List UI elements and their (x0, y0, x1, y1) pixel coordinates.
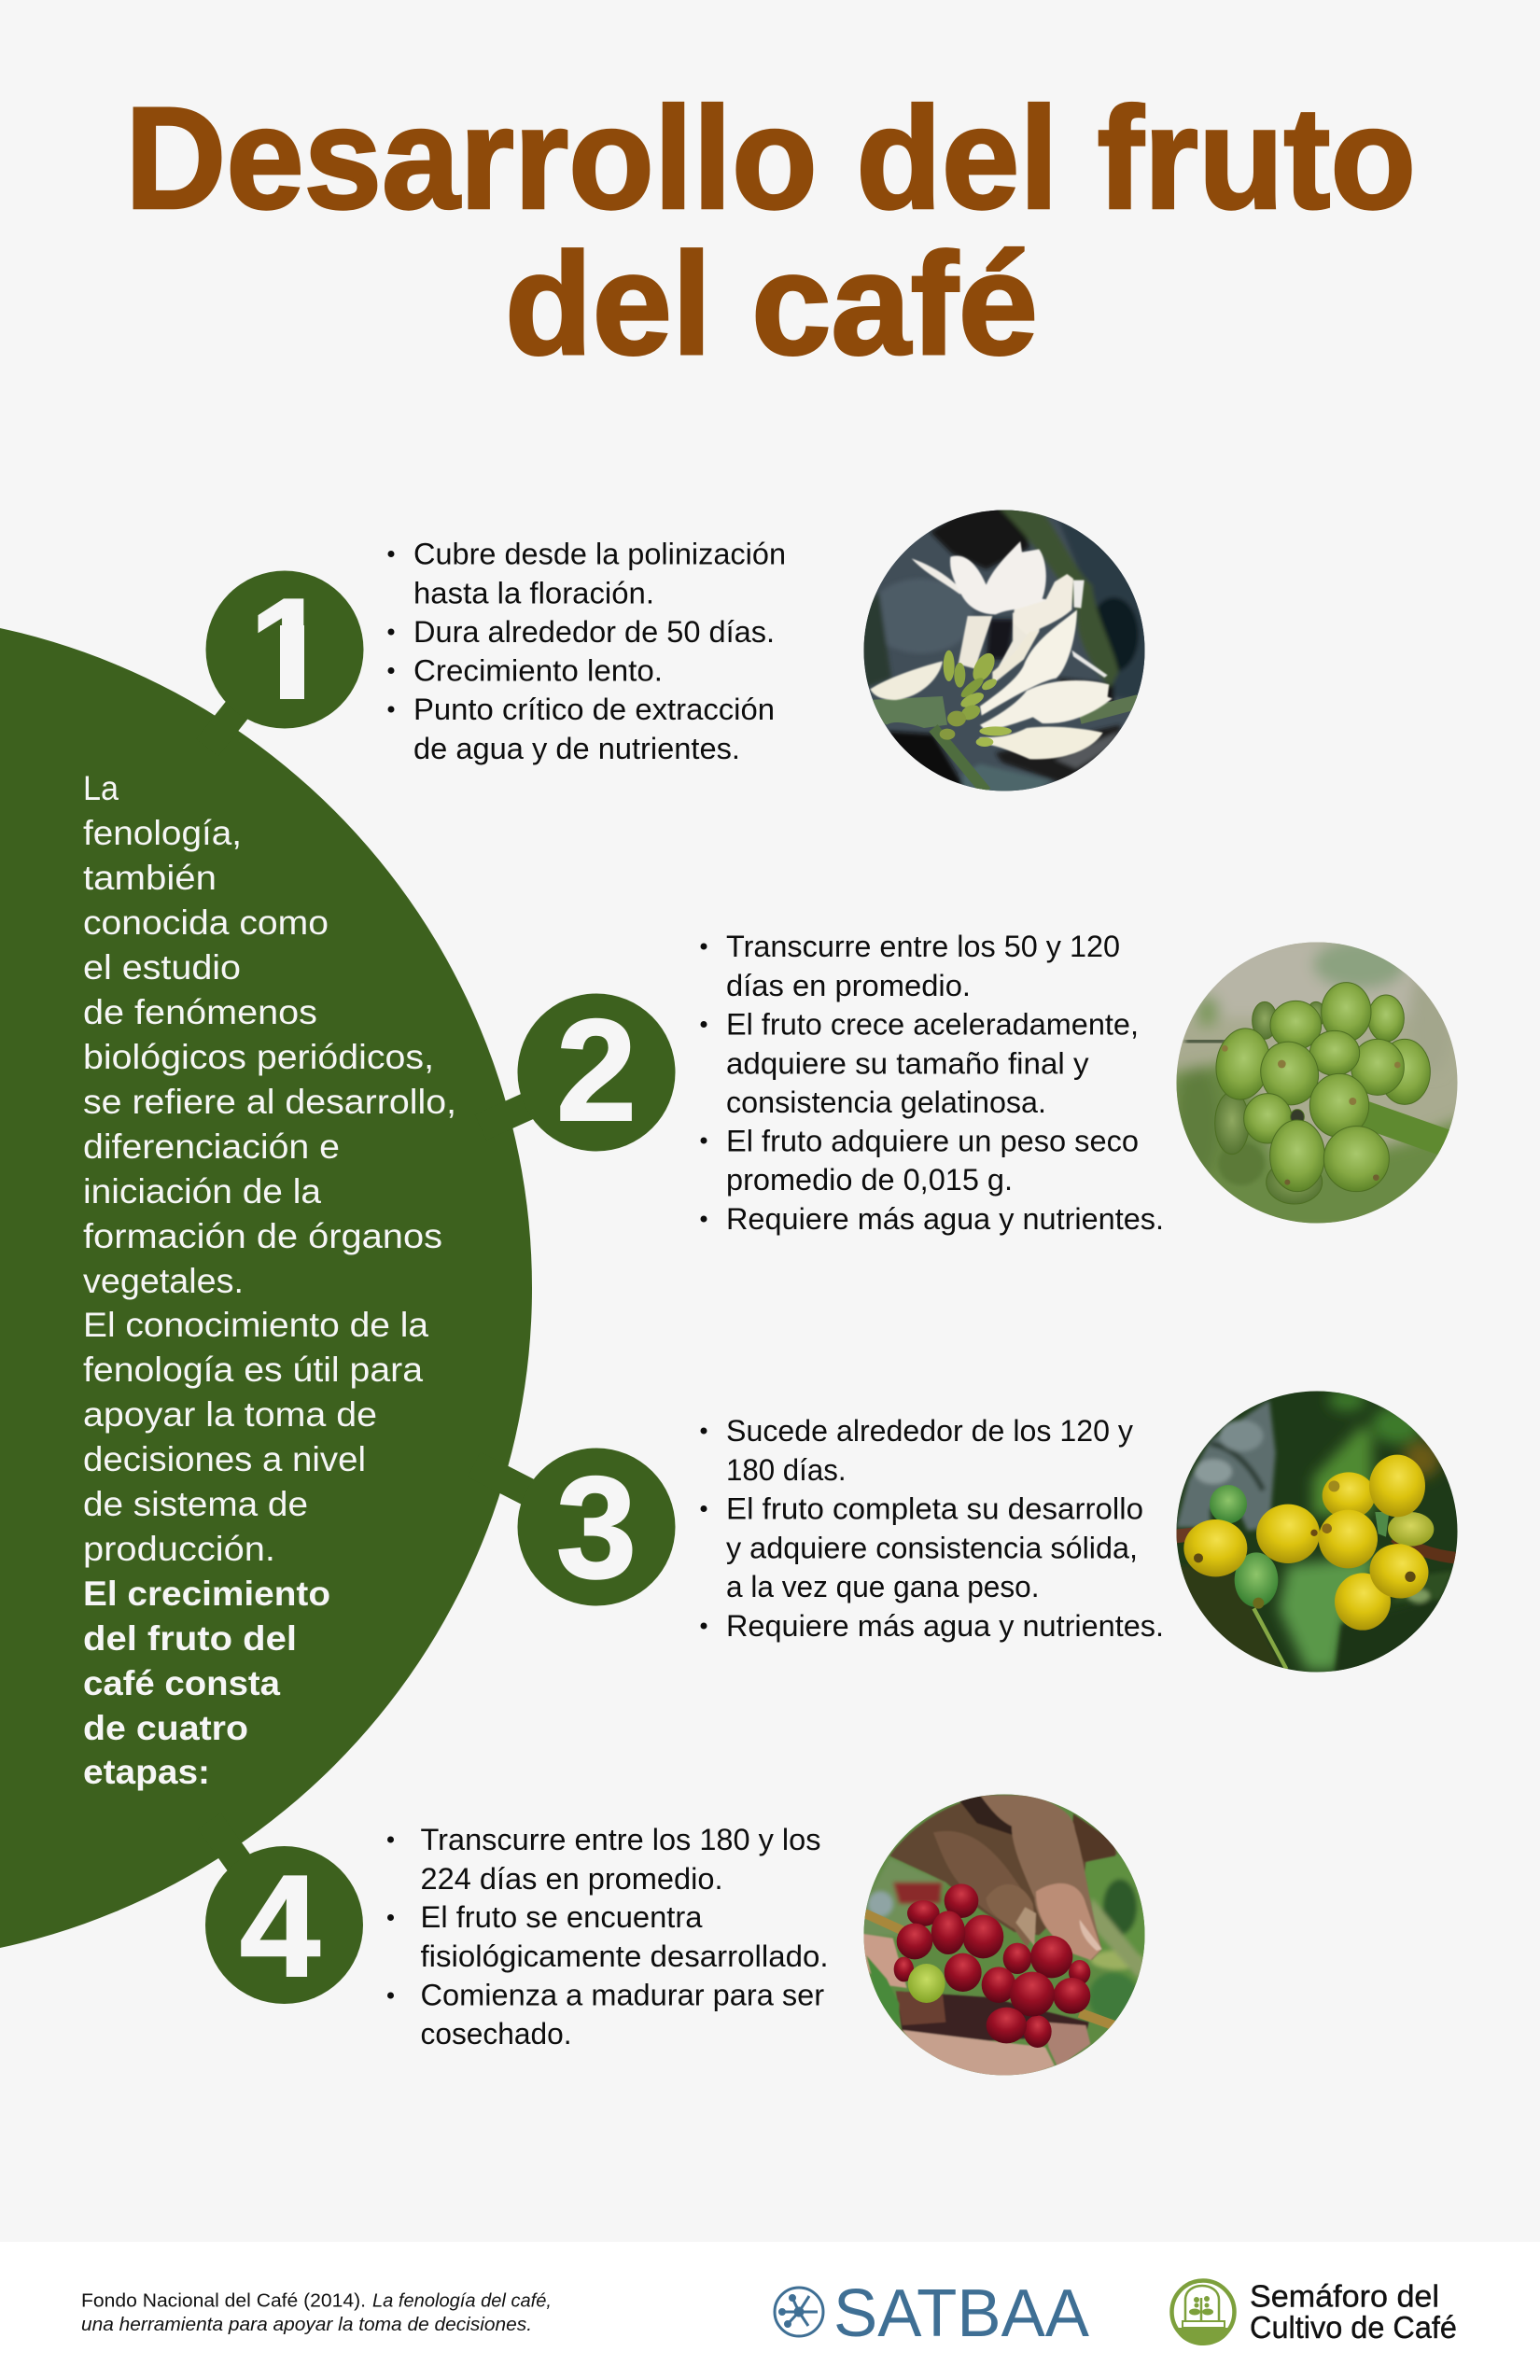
photo 4: hands with ripe red berries (864, 1794, 1144, 2076)
panel: big green semicircle (0, 612, 532, 1964)
step 2 number badge: 2 (556, 989, 637, 1151)
step 4 bullet list: Comienza a madurar para ser (420, 1979, 824, 2012)
step 1 bullet list: de agua y de nutrientes. (413, 732, 740, 765)
footer citation: una herramienta para apoyar la toma de decisiones. (81, 2315, 532, 2335)
intro text on green panel: producción. (83, 1530, 275, 1568)
photo 3: yellow coffee berries (1169, 1384, 1465, 1680)
footer citation: La fenología del café, (372, 2291, 552, 2312)
flower petals (870, 541, 1113, 759)
step 1 bullet list: Dura alrededor de 50 días. (413, 615, 775, 649)
step 2 bullet list: El fruto adquiere un peso seco (726, 1124, 1139, 1157)
intro text on green panel: fenología es útil para (83, 1351, 423, 1389)
berries (945, 1883, 978, 1918)
step 3 number badge: 3 (556, 1447, 637, 1608)
intro text on green panel: vegetales. (83, 1262, 244, 1300)
step 2 bullet list: días en promedio. (726, 969, 971, 1002)
connector: circle 2 (481, 1075, 596, 1127)
intro text on green panel: se refiere al desarrollo, (83, 1083, 456, 1121)
intro text on green panel: de sistema de (83, 1485, 308, 1523)
connector: circle 3 (474, 1464, 596, 1527)
title: Desarrollo del fruto (125, 77, 1416, 239)
intro text on green panel: de cuatro (83, 1709, 248, 1747)
step 1 number badge: 1 (249, 568, 329, 730)
berries (1210, 1485, 1247, 1523)
berry stems (1185, 1041, 1225, 1043)
footer citation (81, 2291, 552, 2335)
flower buds (944, 651, 955, 681)
step 2 bullet list (700, 930, 1164, 1236)
step 1 bullet list: Crecimiento lento. (413, 654, 663, 688)
photo 2: green coffee berries (1176, 943, 1458, 1223)
step 2 bullet list: Transcurre entre los 50 y 120 (726, 930, 1120, 963)
photo 1: coffee flowers (859, 504, 1151, 796)
step 3 bullet list: 180 días. (726, 1453, 846, 1487)
intro text on green panel: el estudio (83, 948, 241, 987)
intro text on green panel (83, 769, 456, 1791)
step 1 bullet list: hasta la floración. (413, 576, 654, 609)
intro text on green panel: diferenciación e (83, 1127, 340, 1166)
title (125, 77, 1416, 385)
intro text on green panel: formación de órganos (83, 1217, 442, 1255)
intro text on green panel: del fruto del (83, 1619, 297, 1658)
step 2 bullet list: El fruto crece aceleradamente, (726, 1008, 1139, 1042)
step 1 bullet list: Punto crítico de extracción (413, 693, 775, 726)
step 3 bullet list (700, 1414, 1164, 1643)
step 3 bullet list: a la vez que gana peso. (726, 1570, 1040, 1603)
logo: SATBAA: SATBAA (833, 2276, 1089, 2351)
intro text on green panel: también (83, 859, 217, 897)
intro text on green panel: fenología, (83, 814, 242, 852)
logo: Semáforo del Cultivo de Café: Cultivo de Café (1250, 2310, 1457, 2345)
step 4 bullet list: fisiológicamente desarrollado. (420, 1939, 829, 1973)
branch (1176, 1533, 1197, 1536)
step 3 number badge (517, 1447, 676, 1608)
logo: Semáforo del Cultivo de Café: Semáforo del (1250, 2279, 1439, 2314)
intro text on green panel: de fenómenos (83, 993, 317, 1031)
step 3 bullet list: El fruto completa su desarrollo (726, 1492, 1143, 1526)
step 3 bullet list: Sucede alrededor de los 120 y (726, 1414, 1133, 1448)
step 1 bullet list: Cubre desde la polinización (413, 538, 786, 571)
flower stems (868, 696, 947, 728)
back fingers (861, 1795, 1117, 2081)
step 4 bullet list: Transcurre entre los 180 y los (420, 1823, 821, 1856)
step 3 bullet list: y adquiere consistencia sólida, (726, 1531, 1138, 1564)
intro text on green panel: La (83, 769, 119, 807)
intro text on green panel: El crecimiento (83, 1575, 330, 1613)
intro text on green panel: conocida como (83, 903, 329, 942)
step 4 bullet list: El fruto se encuentra (420, 1900, 703, 1934)
step 2 bullet list: promedio de 0,015 g. (726, 1163, 1013, 1197)
lower hand (861, 1934, 907, 1988)
step 4 bullet list (387, 1823, 829, 2051)
connector: circle 1 (207, 650, 285, 748)
footer citation: Fondo Nacional del Café (2014). (81, 2291, 366, 2312)
step 2 number badge (517, 989, 676, 1152)
step 4 bullet list: cosechado. (420, 2017, 571, 2051)
intro text on green panel: etapas: (83, 1753, 210, 1791)
step 2 bullet list: consistencia gelatinosa. (726, 1085, 1046, 1119)
intro text on green panel: apoyar la toma de (83, 1395, 377, 1434)
step 3 bullet list: Requiere más agua y nutrientes. (726, 1609, 1164, 1643)
connector: circle 4 (209, 1821, 284, 1925)
title: del café (505, 223, 1038, 385)
step 4 number badge (205, 1845, 363, 2007)
step 4 number badge: 4 (240, 1845, 320, 2007)
footer band (0, 2242, 1540, 2380)
logo: Semáforo del Cultivo de Café (1172, 2279, 1457, 2345)
intro text on green panel: biológicos periódicos, (83, 1038, 434, 1076)
berries (1218, 1141, 1265, 1185)
intro text on green panel: café consta (83, 1664, 280, 1702)
icon: SATBAA network (775, 2288, 823, 2336)
icon: plant under dome (1172, 2281, 1234, 2345)
step 2 bullet list: Requiere más agua y nutrientes. (726, 1202, 1164, 1236)
step 1 number badge (205, 568, 364, 730)
intro text on green panel: iniciación de la (83, 1172, 321, 1211)
intro text on green panel: decisiones a nivel (83, 1440, 366, 1478)
intro text on green panel: El conocimiento de la (83, 1306, 428, 1344)
step 1 bullet list (388, 538, 786, 765)
step 2 bullet list: adquiere su tamaño final y (726, 1047, 1088, 1081)
step 4 bullet list: 224 días en promedio. (420, 1862, 722, 1896)
